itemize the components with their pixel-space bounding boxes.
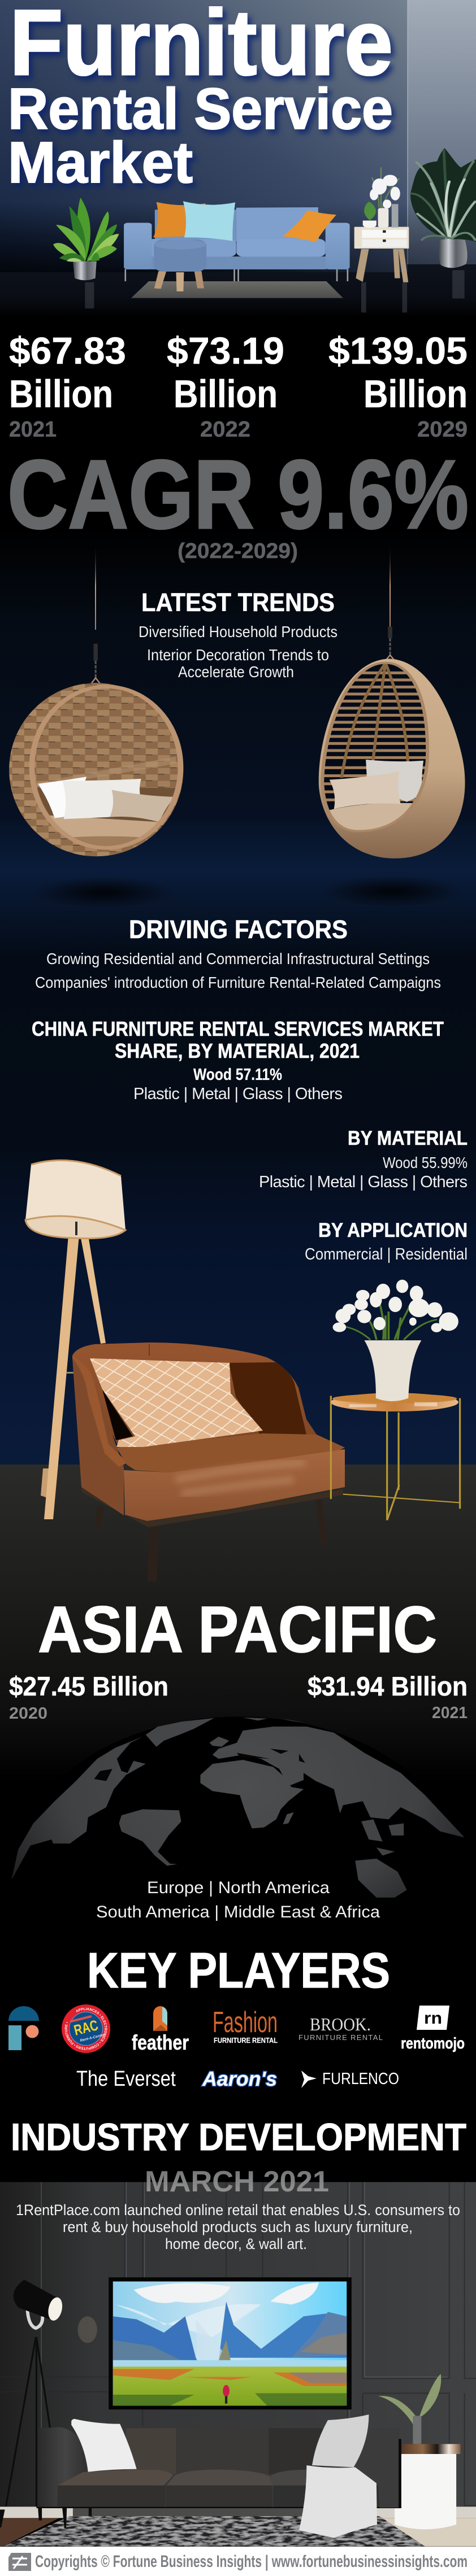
title: [8, 0, 393, 195]
continent: islands of South-East Asia: [361, 1819, 404, 1856]
logo: 1RentPlace: [8, 2006, 39, 2050]
black sofa: [0, 2427, 401, 2529]
illustration: hanging wicker egg chair: [9, 542, 185, 856]
page background: navy and floor gradients: [0, 308, 476, 2182]
panel: by material segment: Plastic | Metal | Glass | Others: [259, 1173, 468, 1191]
shag rug: [3, 2516, 425, 2547]
logo: Rent-A-Center: RAC: [72, 2016, 100, 2039]
framed painting: [109, 2277, 352, 2409]
driving factor items: Companies' introduction of Furniture Rental-Related Campaigns: [35, 974, 441, 991]
illustration: hanging teardrop pod chair: [319, 542, 465, 858]
panel: header living room scene: [0, 0, 476, 317]
trend items: [139, 623, 337, 681]
lower room: sofa, rug, table: [0, 2414, 476, 2547]
sofa: [124, 207, 350, 281]
panel: key player logos: [8, 2004, 465, 2091]
logo: Feather: feather: [132, 2031, 189, 2054]
title: Rental Service: [8, 76, 393, 141]
heading: driving factors: DRIVING FACTORS: [129, 915, 348, 944]
logo: Furlenco: [301, 2070, 399, 2088]
white vase: [364, 1340, 421, 1401]
painting mountains: [113, 2302, 347, 2361]
panel: by material segment: [259, 1127, 468, 1191]
driving factor items: Growing Residential and Commercial Infrastructural Settings: [46, 950, 430, 967]
plant in glass vase: [378, 2374, 441, 2443]
panel: industry development room scene: [0, 2182, 476, 2547]
painting field: [113, 2366, 347, 2405]
inner dark side: [229, 1362, 306, 1435]
panel: latest trends text: [139, 588, 337, 681]
stat 2021: $67.83: [9, 330, 126, 372]
icon: Fortune Business Insights logo: [8, 2553, 31, 2571]
other regions list: Europe | North America: [147, 1878, 330, 1897]
seat cushion top: [116, 1433, 345, 1472]
rug: [131, 281, 343, 298]
heading band: industry development: [0, 2109, 476, 2182]
chair legs: [96, 1500, 328, 1581]
chair floor shadows: [33, 875, 462, 908]
left plant: [53, 198, 119, 280]
arm roll: [72, 1355, 128, 1467]
CAGR figure: (2022-2029): [178, 539, 298, 563]
stat 2029: [328, 330, 468, 442]
painting figure: [223, 2385, 230, 2397]
panel: by application segment: [305, 1219, 468, 1263]
illustration: copper side table with tulips: [331, 1280, 460, 1520]
floor reflections: [85, 270, 465, 312]
panel: market size figures: [9, 330, 468, 442]
painting water: [113, 2360, 347, 2368]
stat 2022: 2022: [200, 417, 250, 442]
logo: Rent-A-Center: Rent-A-Center: [80, 2033, 105, 2043]
stat 2021: 2021: [9, 417, 57, 442]
continent: Eurasia: [213, 1727, 465, 1837]
footer copyright bar: [0, 2547, 476, 2576]
continent: North America: [11, 1737, 146, 1880]
painting clouds: [133, 2282, 319, 2304]
heading: latest trends: LATEST TRENDS: [141, 588, 335, 617]
outer side panel: [72, 1358, 124, 1515]
illustration: leather armchair with pillow: [72, 1343, 345, 1581]
panel: driving factors: [35, 915, 441, 991]
panel: Asia Pacific values: [9, 1671, 468, 1723]
logo: Brook Furniture Rental: [298, 2014, 383, 2042]
glass vase: [413, 2416, 421, 2444]
wood and tile floor: [0, 2518, 476, 2547]
panel: Asia Pacific values: $31.94 Billion: [308, 1671, 468, 1701]
room wall: [0, 2182, 476, 2510]
dark gap behind pillow: [102, 1389, 133, 1440]
floor lamp: [2, 2279, 97, 2526]
stat 2022: $73.19: [167, 330, 284, 372]
title: Market: [8, 130, 193, 195]
China share values: Plastic | Metal | Glass | Others: [133, 1085, 343, 1103]
pillows: [153, 201, 336, 242]
continent: Greenland: [146, 1718, 214, 1747]
heading: China market share: SHARE, BY MATERIAL, 2021: [115, 1039, 360, 1062]
stat 2029: 2029: [417, 417, 468, 442]
logo: Feather: [132, 2006, 189, 2054]
date: March 2021: MARCH 2021: [145, 2165, 329, 2198]
panel: Asia Pacific values: 2020: [9, 1705, 47, 1723]
logo: Rentomojo: rn: [424, 2009, 442, 2028]
panel: Asia Pacific values: $27.45 Billion: [9, 1671, 168, 1701]
industry development description: rent & buy household products such as luxury furniture,: [63, 2218, 413, 2235]
ottoman: [154, 239, 206, 291]
illustration: floor lamp: [25, 1160, 126, 1519]
illustration: sofa, ottoman, side table and plants: [53, 148, 476, 312]
logo: Rentomojo: rentomojo: [401, 2034, 465, 2052]
heading: Asia Pacific: ASIA PACIFIC: [38, 1593, 437, 1666]
continent: Africa: [200, 1760, 304, 1828]
logo: Aaron's: Aaron's: [202, 2067, 277, 2090]
heading: China market share: [32, 1017, 444, 1062]
logo: Rent-A-Center: APPLIANCES • ELECTRONICS • COMPUTERS • FURNITURE •: [64, 2007, 107, 2050]
industry development description: [16, 2202, 460, 2252]
logo: Fashion Furniture Rental: FURNITURE RENTAL: [214, 2036, 278, 2045]
chair base: [81, 1487, 344, 1527]
trend items: Interior Decoration Trends to: [147, 646, 329, 664]
China share values: Wood 57.11%: [193, 1066, 282, 1084]
white side table: [395, 2444, 461, 2529]
trend items: Diversified Household Products: [139, 623, 337, 640]
stat 2029: $139.05: [328, 330, 468, 372]
logo: Rentomojo: [401, 2006, 465, 2052]
logo: Furlenco: FURLENCO: [322, 2070, 399, 2088]
heading: key players: KEY PLAYERS: [87, 1942, 390, 1998]
illustration: dark world globe: [11, 1716, 466, 2043]
continent: South America: [119, 1809, 181, 1865]
continent: Australia: [355, 1859, 407, 1898]
logo: Brook Furniture Rental: BROOK.: [310, 2014, 371, 2034]
logo: Fashion Furniture Rental: [213, 2006, 278, 2045]
other regions list: [96, 1878, 380, 1921]
panel: Asia Pacific values: 2021: [432, 1704, 468, 1722]
front cushion: [124, 1449, 345, 1521]
industry development description: home decor, & wall art.: [165, 2235, 307, 2252]
stat 2021: Billion: [9, 372, 113, 416]
stat 2022: [167, 330, 284, 442]
tulip blooms: [333, 1280, 458, 1332]
stat 2021: [9, 330, 126, 442]
tulip stems: [340, 1293, 437, 1340]
white pillows and throw: [71, 2414, 377, 2538]
logo: Brook Furniture Rental: FURNITURE RENTAL: [298, 2033, 383, 2042]
header floor: [0, 264, 476, 317]
panel: China market share by material: [32, 1017, 444, 1103]
trend items: Accelerate Growth: [178, 663, 294, 681]
header wall: [0, 0, 476, 272]
side table with vase and plant: [354, 167, 409, 282]
chair back shell: [72, 1343, 345, 1463]
wall paneling: [0, 2182, 476, 2509]
driving factor items: [35, 950, 441, 991]
right palm plant: [410, 148, 476, 268]
logo: The Everset: The Everset: [76, 2067, 176, 2091]
lattice pillow: [90, 1358, 263, 1447]
logo: Fashion Furniture Rental: Fashion: [213, 2006, 278, 2039]
other regions list: South America | Middle East & Africa: [96, 1903, 380, 1921]
baseboard: [0, 2507, 476, 2518]
China share values: [133, 1066, 343, 1103]
stat 2022: Billion: [174, 372, 278, 416]
